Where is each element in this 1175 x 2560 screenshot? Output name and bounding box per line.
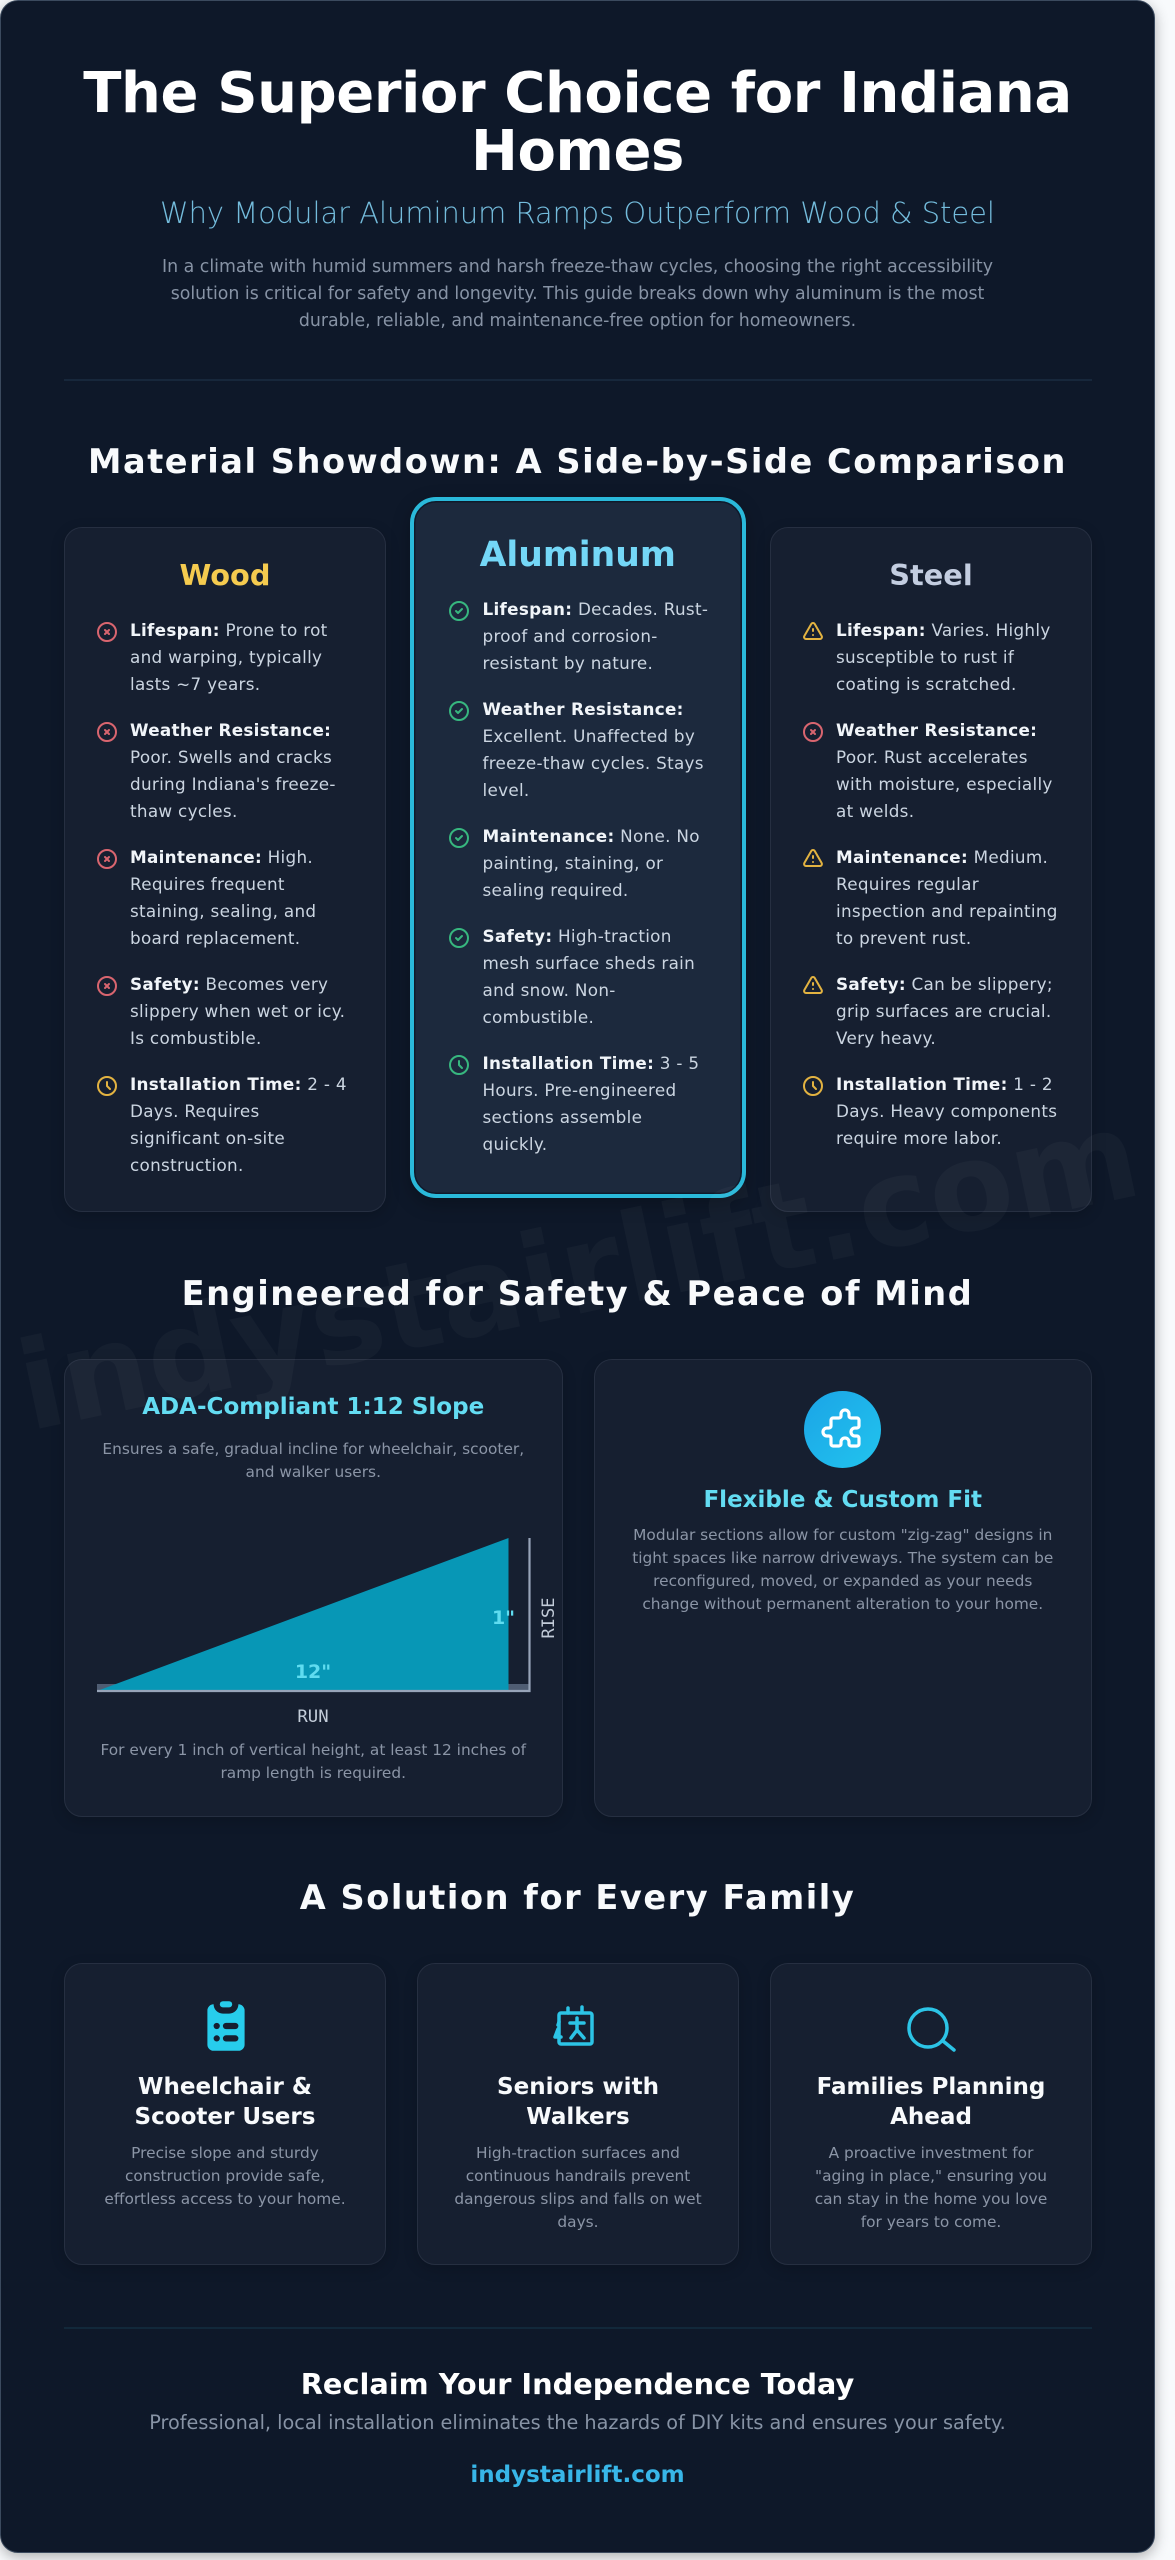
panel: flexible fit	[594, 1359, 1092, 1817]
aluminum list: mesh surface sheds rain	[482, 953, 695, 973]
panel: ADA slope	[64, 1359, 562, 1817]
families description: can stay in the home you love	[815, 2190, 1047, 2208]
steel list: Poor. Rust accelerates	[836, 747, 1028, 767]
intro paragraph: In a climate with humid summers and harsh freeze-thaw cycles, choosing the right accessibility	[162, 257, 993, 277]
flexible description: change without permanent alteration to your home.	[642, 1595, 1043, 1613]
wheelchair title	[134, 2074, 316, 2130]
wood list: thaw cycles.	[130, 801, 238, 821]
steel list: Maintenance: Medium.	[836, 847, 1048, 867]
wood list: Is combustible.	[130, 1028, 262, 1048]
run label: RUN	[297, 1707, 329, 1727]
seniors description: continuous handrails prevent	[466, 2167, 690, 2185]
steel list	[803, 620, 1058, 1148]
wheelchair title: Scooter Users	[134, 2104, 316, 2130]
wood list: construction.	[130, 1155, 244, 1175]
aluminum list: Weather Resistance:	[482, 699, 684, 719]
wood list: significant on-site	[130, 1128, 285, 1148]
rise value: 1"	[492, 1607, 515, 1629]
wood list: board replacement.	[130, 928, 300, 948]
steel list: susceptible to rust if	[836, 647, 1014, 667]
watermark: indystairlift.com	[6, 1082, 1151, 1459]
icon: magnifier	[907, 2007, 956, 2052]
ADA heading: ADA-Compliant 1:12 Slope	[142, 1394, 484, 1420]
families description	[815, 2144, 1047, 2231]
ADA description: and walker users.	[246, 1463, 381, 1481]
wheelchair title: Wheelchair &	[138, 2074, 312, 2100]
ramp diagram	[97, 1538, 559, 1727]
aluminum list: resistant by nature.	[482, 653, 653, 673]
families title	[817, 2074, 1045, 2130]
header title	[83, 61, 1072, 184]
aluminum list: painting, staining, or	[482, 853, 663, 873]
seniors title: Walkers	[526, 2104, 630, 2130]
families title: Families Planning	[817, 2074, 1045, 2100]
panel: seniors	[417, 1963, 739, 2265]
aluminum title: Aluminum	[480, 535, 676, 575]
steel list: Days. Heavy components	[836, 1101, 1057, 1121]
panel: wood	[64, 527, 386, 1212]
flexible heading: Flexible & Custom Fit	[703, 1486, 982, 1512]
aluminum list: Lifespan: Decades. Rust-	[482, 599, 708, 619]
aluminum list: Safety: High-traction	[482, 926, 672, 946]
footer heading: Reclaim Your Independence Today	[301, 2367, 854, 2401]
icon: calendar walker	[553, 2005, 594, 2046]
ADA caption	[100, 1740, 526, 1782]
wood list: staining, sealing, and	[130, 901, 316, 921]
wood list: Safety: Becomes very	[130, 974, 328, 994]
seniors description: days.	[557, 2213, 599, 2231]
intro paragraph: durable, reliable, and maintenance-free option for homeowners.	[299, 311, 856, 331]
wood list: during Indiana's freeze-	[130, 774, 336, 794]
aluminum list: Installation Time: 3 - 5	[482, 1053, 699, 1073]
panel: aluminum	[410, 497, 746, 1198]
aluminum list: sections assemble	[482, 1107, 642, 1127]
steel list: inspection and repainting	[836, 901, 1058, 921]
ADA caption: ramp length is required.	[220, 1764, 406, 1782]
heading: material showdown: Material Showdown: A Side-by-Side Comparison	[88, 442, 1067, 481]
panel: steel	[770, 527, 1092, 1212]
ADA description: Ensures a safe, gradual incline for wheelchair, scooter,	[102, 1440, 524, 1458]
steel list: with moisture, especially	[836, 774, 1053, 794]
wood list: slippery when wet or icy.	[130, 1001, 345, 1021]
wheelchair description: Precise slope and sturdy	[131, 2144, 319, 2162]
steel list: Safety: Can be slippery;	[836, 974, 1053, 994]
wheelchair description: construction provide safe,	[125, 2167, 325, 2185]
heading: safety: Engineered for Safety & Peace of Mind	[182, 1274, 973, 1313]
seniors description	[454, 2144, 702, 2231]
ADA description	[102, 1440, 524, 1481]
wood title: Wood	[180, 558, 270, 592]
wood list: Lifespan: Prone to rot	[130, 620, 328, 640]
wood list: lasts ~7 years.	[130, 674, 260, 694]
steel list: require more labor.	[836, 1128, 1002, 1148]
footer link: indystairlift.com	[470, 2462, 685, 2488]
wood list: and warping, typically	[130, 647, 322, 667]
rise label: RISE	[539, 1598, 559, 1638]
wood list	[97, 620, 347, 1175]
intro paragraph: solution is critical for safety and longevity. This guide breaks down why aluminum is the most	[171, 284, 984, 304]
steel list: Very heavy.	[836, 1028, 936, 1048]
aluminum list: level.	[482, 780, 530, 800]
panel: wheelchair users	[64, 1963, 386, 2265]
steel list: grip surfaces are crucial.	[836, 1001, 1052, 1021]
flexible description	[632, 1526, 1053, 1613]
aluminum list: Maintenance: None. No	[482, 826, 700, 846]
flexible description: tight spaces like narrow driveways. The system can be	[632, 1549, 1053, 1567]
wood list: Days. Requires	[130, 1101, 260, 1121]
subtitle: Why Modular Aluminum Ramps Outperform Wood & Steel	[160, 196, 995, 230]
wood list: Weather Resistance:	[130, 720, 331, 740]
aluminum list: proof and corrosion-	[482, 626, 658, 646]
steel list: Requires regular	[836, 874, 979, 894]
steel title: Steel	[889, 558, 973, 592]
wheelchair description	[104, 2144, 346, 2208]
aluminum list: Excellent. Unaffected by	[482, 726, 695, 746]
header title: Homes	[471, 118, 684, 184]
aluminum list: Hours. Pre-engineered	[482, 1080, 676, 1100]
run value: 12"	[295, 1661, 331, 1683]
heading: every family: A Solution for Every Family	[300, 1878, 855, 1917]
steel list: Installation Time: 1 - 2	[836, 1074, 1053, 1094]
aluminum list: sealing required.	[482, 880, 629, 900]
flexible description: reconfigured, moved, or expanded as your needs	[653, 1572, 1032, 1590]
aluminum list: quickly.	[482, 1134, 547, 1154]
seniors description: High-traction surfaces and	[476, 2144, 680, 2162]
families description: for years to come.	[861, 2213, 1001, 2231]
icon: puzzle	[804, 1391, 881, 1468]
aluminum list: freeze-thaw cycles. Stays	[482, 753, 704, 773]
seniors description: dangerous slips and falls on wet	[454, 2190, 702, 2208]
steel list: at welds.	[836, 801, 914, 821]
steel list: Weather Resistance:	[836, 720, 1037, 740]
seniors title	[497, 2074, 659, 2130]
families description: "aging in place," ensuring you	[815, 2167, 1047, 2185]
ADA caption: For every 1 inch of vertical height, at least 12 inches of	[100, 1740, 526, 1758]
wood list: Poor. Swells and cracks	[130, 747, 332, 767]
footer text: Professional, local installation eliminates the hazards of DIY kits and ensures your safety.	[149, 2411, 1006, 2434]
aluminum list	[449, 599, 708, 1154]
header title: The Superior Choice for Indiana	[83, 61, 1072, 126]
steel list: to prevent rust.	[836, 928, 972, 948]
steel list: Lifespan: Varies. Highly	[836, 620, 1051, 640]
steel list: coating is scratched.	[836, 674, 1017, 694]
seniors title: Seniors with	[497, 2074, 659, 2100]
aluminum list: and snow. Non-	[482, 980, 616, 1000]
intro paragraph	[162, 257, 993, 331]
wheelchair description: effortless access to your home.	[104, 2190, 346, 2208]
wood list: Maintenance: High.	[130, 847, 313, 867]
aluminum list: combustible.	[482, 1007, 594, 1027]
icon: clipboard	[207, 2001, 245, 2051]
families description: A proactive investment for	[829, 2144, 1033, 2162]
panel: families	[770, 1963, 1092, 2265]
wood list: Requires frequent	[130, 874, 285, 894]
wood list: Installation Time: 2 - 4	[130, 1074, 347, 1094]
families title: Ahead	[890, 2104, 972, 2130]
flexible description: Modular sections allow for custom "zig-zag" designs in	[633, 1526, 1052, 1544]
